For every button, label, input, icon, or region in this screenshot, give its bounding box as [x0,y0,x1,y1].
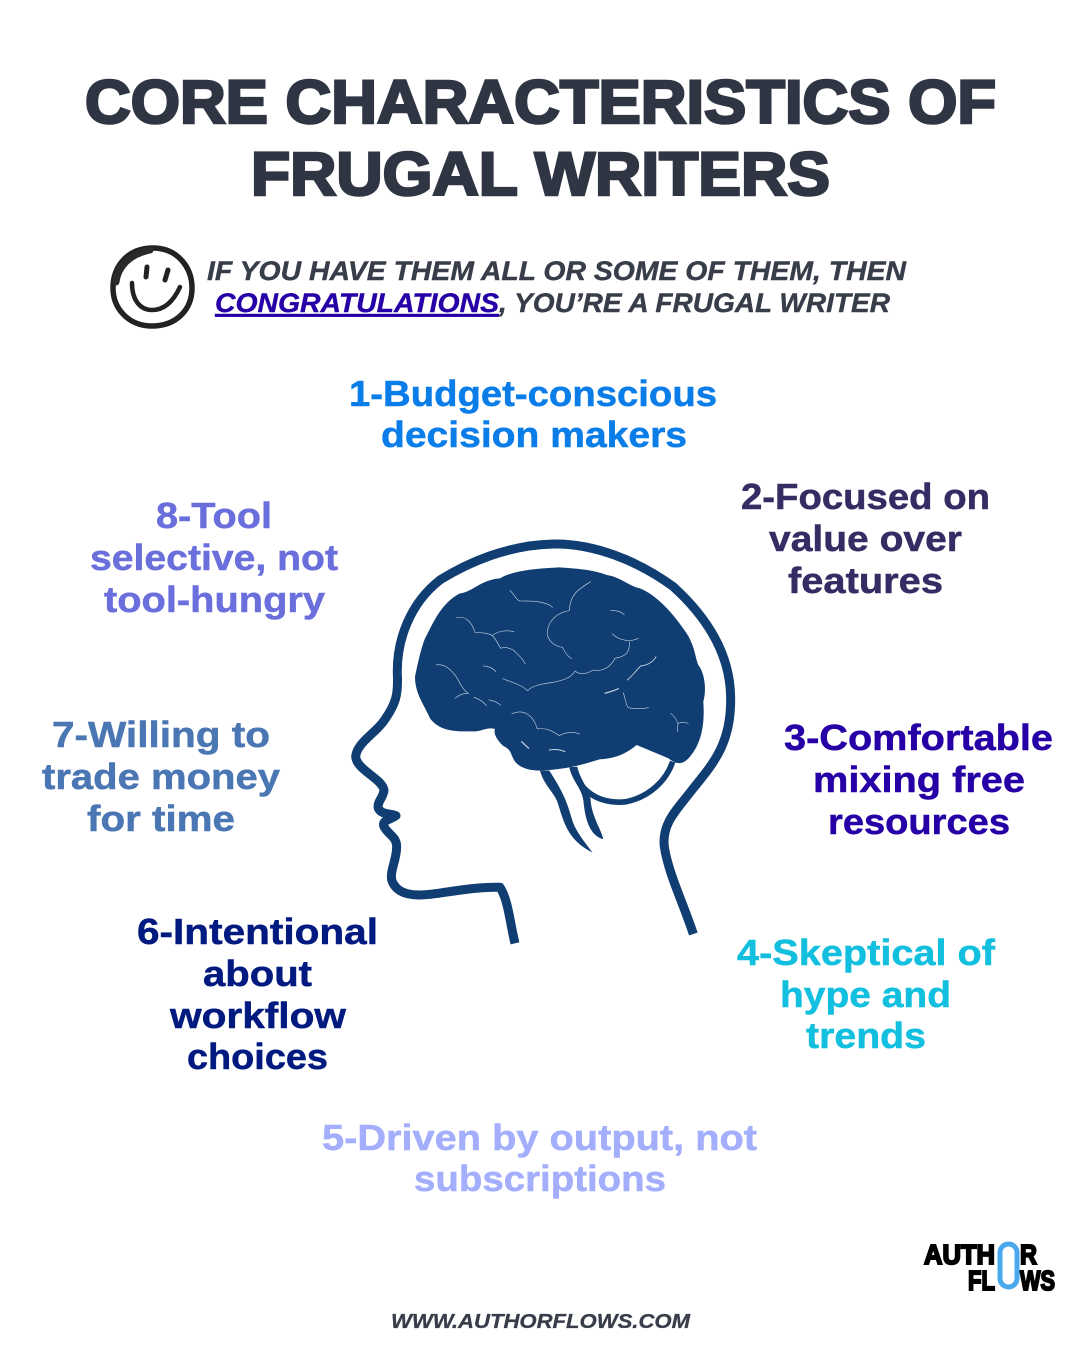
logo: Author Flows: WS [1020,1265,1055,1296]
title: FRUGAL WRITERS [251,140,830,208]
subtitle: CONGRATULATIONS [215,288,499,318]
characteristic 2: features [788,560,943,601]
subtitle: IF YOU HAVE THEM ALL OR SOME OF THEM, THEN [207,256,907,286]
logo: Author Flows: FL [968,1265,995,1296]
characteristic 4: 4-Skeptical of [737,932,996,973]
characteristic 6: about [203,953,312,994]
characteristic 7: 7-Willing to [52,714,270,755]
characteristic 8: tool-hungry [104,579,325,620]
subtitle [207,256,907,318]
characteristic 5: subscriptions [414,1158,666,1199]
characteristic 7: trade money [42,756,280,797]
subtitle: , YOU’RE A FRUGAL WRITER [498,288,891,318]
characteristic 4: trends [806,1015,926,1056]
logo: Author Flows: R [1020,1239,1037,1270]
characteristic 1: decision makers [381,414,687,455]
characteristic 5: 5-Driven by output, not [322,1117,757,1158]
characteristic 2: value over [769,518,962,559]
characteristic 1 [349,373,717,455]
characteristic 5 [322,1117,757,1199]
brain folds [436,582,688,752]
characteristic 8: selective, not [90,537,338,578]
cerebellum arc [580,762,673,802]
characteristic 4 [737,932,996,1056]
characteristic 3 [784,717,1053,842]
characteristic 6: workflow [169,995,347,1036]
characteristic 3: 3-Comfortable [784,717,1053,758]
characteristic 3: resources [828,801,1010,842]
characteristic 3: mixing free [813,759,1025,800]
head outline [356,544,731,943]
cerebellum stem [569,767,603,839]
characteristic 8 [90,495,338,620]
characteristic 2 [741,476,990,601]
characteristic 8: 8-Tool [156,495,272,536]
logo: Author Flows: AUTH [924,1239,995,1270]
title [85,68,996,208]
characteristic 2: 2-Focused on [741,476,990,517]
head and brain illustration [356,544,731,943]
icon: smiley face [113,248,192,326]
title: CORE CHARACTERISTICS OF [85,68,996,136]
characteristic 4: hype and [780,974,951,1015]
brain [415,567,705,771]
characteristic 6: 6-Intentional [137,911,378,952]
characteristic 6 [137,911,378,1077]
logo: Author Flows [924,1239,1055,1296]
characteristic 1: 1-Budget-conscious [349,373,717,414]
characteristic 7: for time [87,798,235,839]
characteristic 6: choices [187,1036,328,1077]
brain stem [540,771,593,853]
footer website: WWW.AUTHORFLOWS.COM [391,1311,691,1333]
characteristic 7 [42,714,280,839]
